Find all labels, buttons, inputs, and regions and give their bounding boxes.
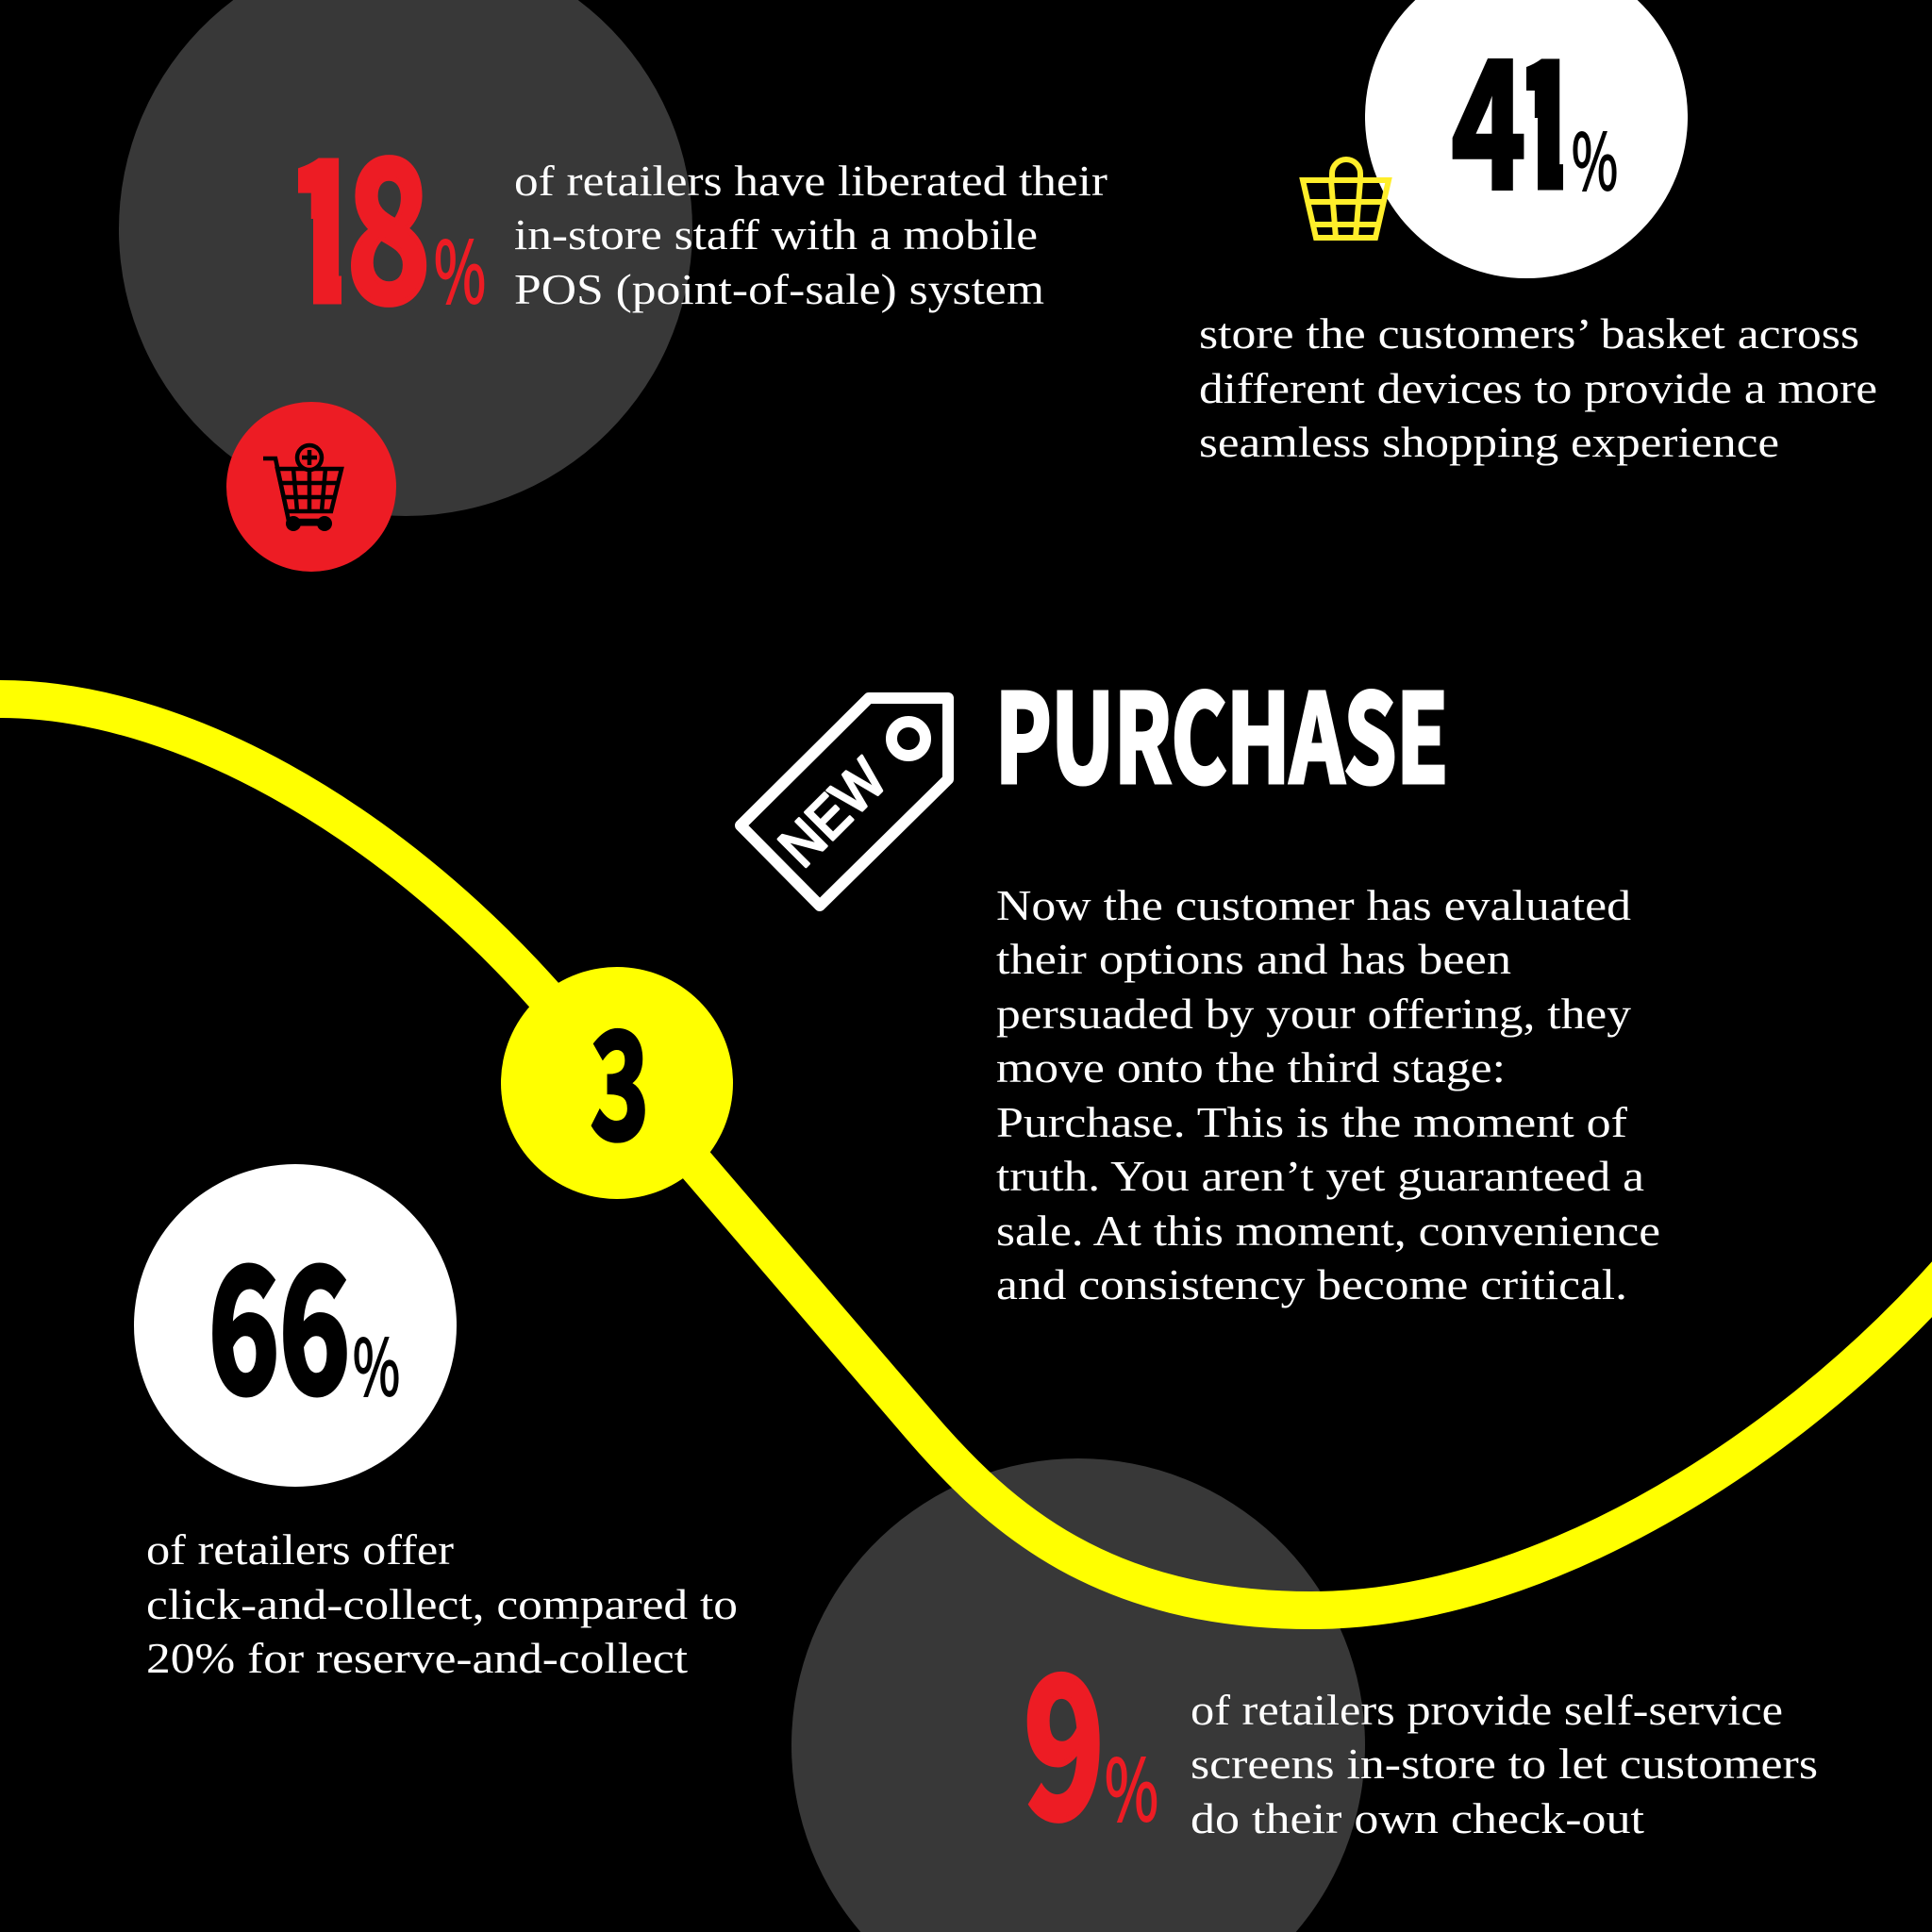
panel: gray circle top-left [119,0,692,516]
stat: 18 percent: 8 [346,75,431,358]
stat circle: 66 percent: % [353,1306,400,1418]
text: 18 percent description: POS (point-of-sale) system [514,265,1044,313]
text: 41 percent description: store the customers’ basket across [1199,309,1859,358]
text: purchase stage description: and consistency become critical. [996,1260,1627,1308]
stat: 9 percent: 9 [1024,1591,1105,1874]
stat: 18 percent: 1 [274,75,370,358]
icon: shopping cart on red circle [226,402,396,572]
text: purchase stage description: their options and has been [996,935,1511,983]
text: 41 percent description [1199,309,1877,466]
stat circle: 66 percent [134,1164,457,1487]
stage number badge: 3 [591,968,649,1181]
text: 66 percent description [146,1525,738,1682]
text: purchase stage description: persuaded by your offering, they [996,990,1631,1038]
icon: yellow basket [1303,159,1389,238]
text: purchase stage description [996,881,1660,1308]
text: 9 percent description [1191,1686,1818,1842]
text: 9 percent description: do their own check-out [1191,1794,1644,1842]
journey curve [0,699,1932,1610]
text: 66 percent description: 20% for reserve-and-collect [146,1634,688,1682]
stat circle: 41 percent: % [1572,100,1618,212]
icon: NEW price tag: NEW [767,747,898,878]
text: 41 percent description: seamless shopping experience [1199,418,1779,466]
text: purchase stage description: move onto the third stage: [996,1043,1506,1091]
text: 66 percent description: click-and-collect, compared to [146,1580,738,1628]
stat: 18 percent [298,155,485,308]
text: 41 percent description: different devices to provide a more [1199,364,1877,412]
stage number badge [501,967,733,1199]
heading: PURCHASE [995,642,1448,817]
stat: 18 percent: % [434,205,486,327]
text: 18 percent description [514,157,1108,313]
text: 18 percent description: in-store staff with a mobile [514,210,1038,258]
text: 18 percent description: of retailers have liberated their [514,157,1108,205]
stat: 9 percent: % [1105,1723,1158,1845]
text: purchase stage description: Now the customer has evaluated [996,881,1631,929]
text: 9 percent description: of retailers provide self-service [1191,1686,1783,1734]
text: purchase stage description: Purchase. This is the moment of [996,1098,1628,1146]
stat circle: 66 percent: 66 [208,1192,350,1442]
text: purchase stage description: truth. You aren’t yet guaranteed a [996,1152,1644,1200]
text: 9 percent description: screens in-store to let customers [1191,1740,1818,1788]
text: purchase stage description: sale. At this moment, convenience [996,1207,1660,1255]
icon: NEW price tag [741,698,948,906]
stat circle: 41 percent [1365,0,1688,278]
panel: gray circle bottom-right [791,1458,1365,1932]
text: 66 percent description: of retailers offer [146,1525,454,1574]
